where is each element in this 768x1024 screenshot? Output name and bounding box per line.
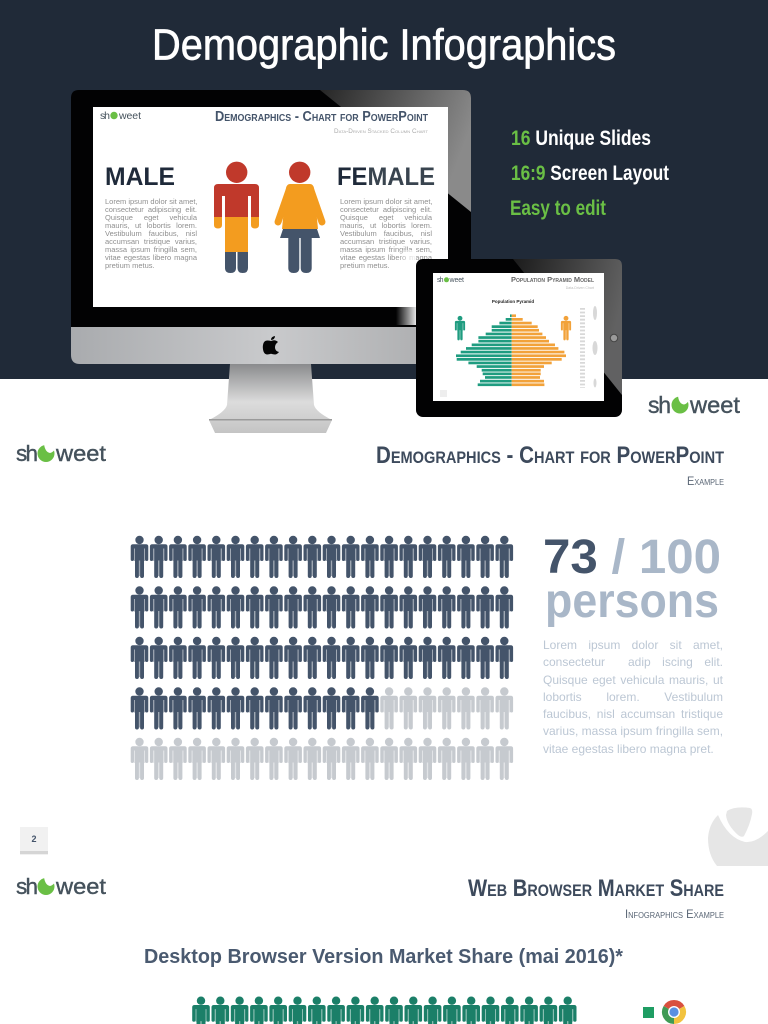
logo: top right: weet xyxy=(689,392,741,418)
icon: chrome xyxy=(662,1000,686,1024)
screen logo: weet xyxy=(118,110,141,122)
male description: vitae egestas libero magna xyxy=(105,253,197,262)
male description: Quisque eget vehicula xyxy=(105,213,197,222)
tablet page marker xyxy=(440,390,447,397)
feature list xyxy=(510,127,669,220)
monitor base edge xyxy=(209,419,332,420)
monitor mockup xyxy=(71,90,471,433)
slide 2 heading: Web Browser Market Share xyxy=(468,875,724,902)
male description: consectetur adipiscing elit. xyxy=(105,205,197,214)
monitor stand xyxy=(209,364,332,433)
page number: 2 xyxy=(31,834,37,844)
female description: pretium metus. xyxy=(340,261,390,270)
male label: MALE xyxy=(105,163,175,191)
tablet glare xyxy=(513,259,622,395)
male description: mauris, ut lobortis lorem. xyxy=(105,221,197,230)
male description: Vestibulum faucibus, nisl xyxy=(105,229,197,238)
pictogram row: browser share xyxy=(192,996,576,1024)
description text: lobortis lorem. Vestibulum xyxy=(543,690,723,704)
tablet subheading: Data-Driven Chart xyxy=(566,286,594,290)
description text: Lorem ipsum dolor sit amet, xyxy=(543,638,723,652)
logo: top right xyxy=(648,392,741,418)
female description xyxy=(340,198,432,278)
header band xyxy=(0,0,768,379)
female label: FEMALE xyxy=(337,163,435,191)
logo: slide 1 xyxy=(16,441,107,466)
tablet logo: sh xyxy=(437,277,444,284)
male description: massa ipsum fringilla sem, xyxy=(105,245,197,254)
watermark logo xyxy=(708,807,768,866)
stat: 73 / 100: 73 / 100 xyxy=(543,531,721,584)
icon: orange person xyxy=(561,316,571,340)
monitor chin xyxy=(71,327,471,364)
female description: Quisque eget vehicula xyxy=(340,213,432,222)
legend swatch xyxy=(643,1007,654,1018)
screen heading: Demographics - Chart for PowerPoint xyxy=(215,109,428,125)
logo: slide 2: sh xyxy=(16,874,38,899)
slide 1 subheading: Example xyxy=(687,474,724,488)
description text: varius, massa ipsum fringilla sem, xyxy=(543,724,723,738)
female description: consectetur adipiscing elit. xyxy=(340,205,432,214)
screen logo xyxy=(100,110,141,122)
female description: vitae egestas libero magna xyxy=(340,253,432,262)
population pyramid chart xyxy=(456,314,566,386)
logo: slide 1: sh xyxy=(16,441,38,466)
female description: massa ipsum fringilla sem, xyxy=(340,245,432,254)
age scale xyxy=(580,308,585,388)
male description xyxy=(105,198,197,278)
monitor bezel xyxy=(71,90,471,327)
description text: faucibus, nisl accumsan tristique xyxy=(543,707,723,721)
icon: male figure xyxy=(214,162,259,273)
slide 2 subheading: Infographics Example xyxy=(625,907,724,921)
icon: teal person xyxy=(455,316,465,340)
female description: mauris, ut lobortis lorem. xyxy=(340,221,432,230)
monitor screen xyxy=(93,107,448,307)
icon: growth silhouettes xyxy=(592,306,598,388)
male description: pretium metus. xyxy=(105,261,155,270)
description text: consectetur adip iscing elit. xyxy=(543,655,723,669)
tablet screen xyxy=(433,273,604,401)
tablet logo xyxy=(437,277,464,284)
logo: slide 2 xyxy=(16,874,107,899)
chart title: Desktop Browser Version Market Share (mai 2016)* xyxy=(144,946,623,968)
pictogram chart: 73 of 100 persons xyxy=(131,536,513,780)
feature list: 16 Unique Slides xyxy=(511,127,651,150)
pyramid chart title: Population Pyramid xyxy=(492,299,534,304)
monitor glare xyxy=(320,90,471,212)
description text xyxy=(543,637,723,762)
stat: persons: persons xyxy=(545,575,719,628)
icon: apple logo xyxy=(263,336,279,354)
description text: vitae egestas libero magna pret. xyxy=(543,742,714,756)
screen subheading: Data-Driven Stacked Column Chart xyxy=(334,129,429,135)
screen fade behind tablet xyxy=(396,250,416,325)
tablet mockup xyxy=(416,259,622,417)
feature list: Easy to edit xyxy=(510,197,606,220)
feature list: 16:9 Screen Layout xyxy=(511,162,669,185)
page number xyxy=(20,827,48,855)
tablet home button xyxy=(610,334,618,342)
title: Demographic Infographics xyxy=(152,20,616,70)
female description: accumsan tristique varius, xyxy=(340,237,432,246)
male description: accumsan tristique varius, xyxy=(105,237,197,246)
tablet body xyxy=(416,259,622,417)
logo: slide 1: weet xyxy=(55,441,107,466)
icon: female figure xyxy=(278,162,322,273)
description text: Quisque eget vehicula mauris, ut xyxy=(543,673,723,687)
female description: Vestibulum faucibus, nisl xyxy=(340,229,432,238)
tablet logo: weet xyxy=(448,277,464,284)
tablet heading: Population Pyramid Model xyxy=(511,275,594,284)
logo: top right: sh xyxy=(648,392,671,418)
logo: slide 2: weet xyxy=(55,874,107,899)
screen logo: sh xyxy=(100,110,110,122)
